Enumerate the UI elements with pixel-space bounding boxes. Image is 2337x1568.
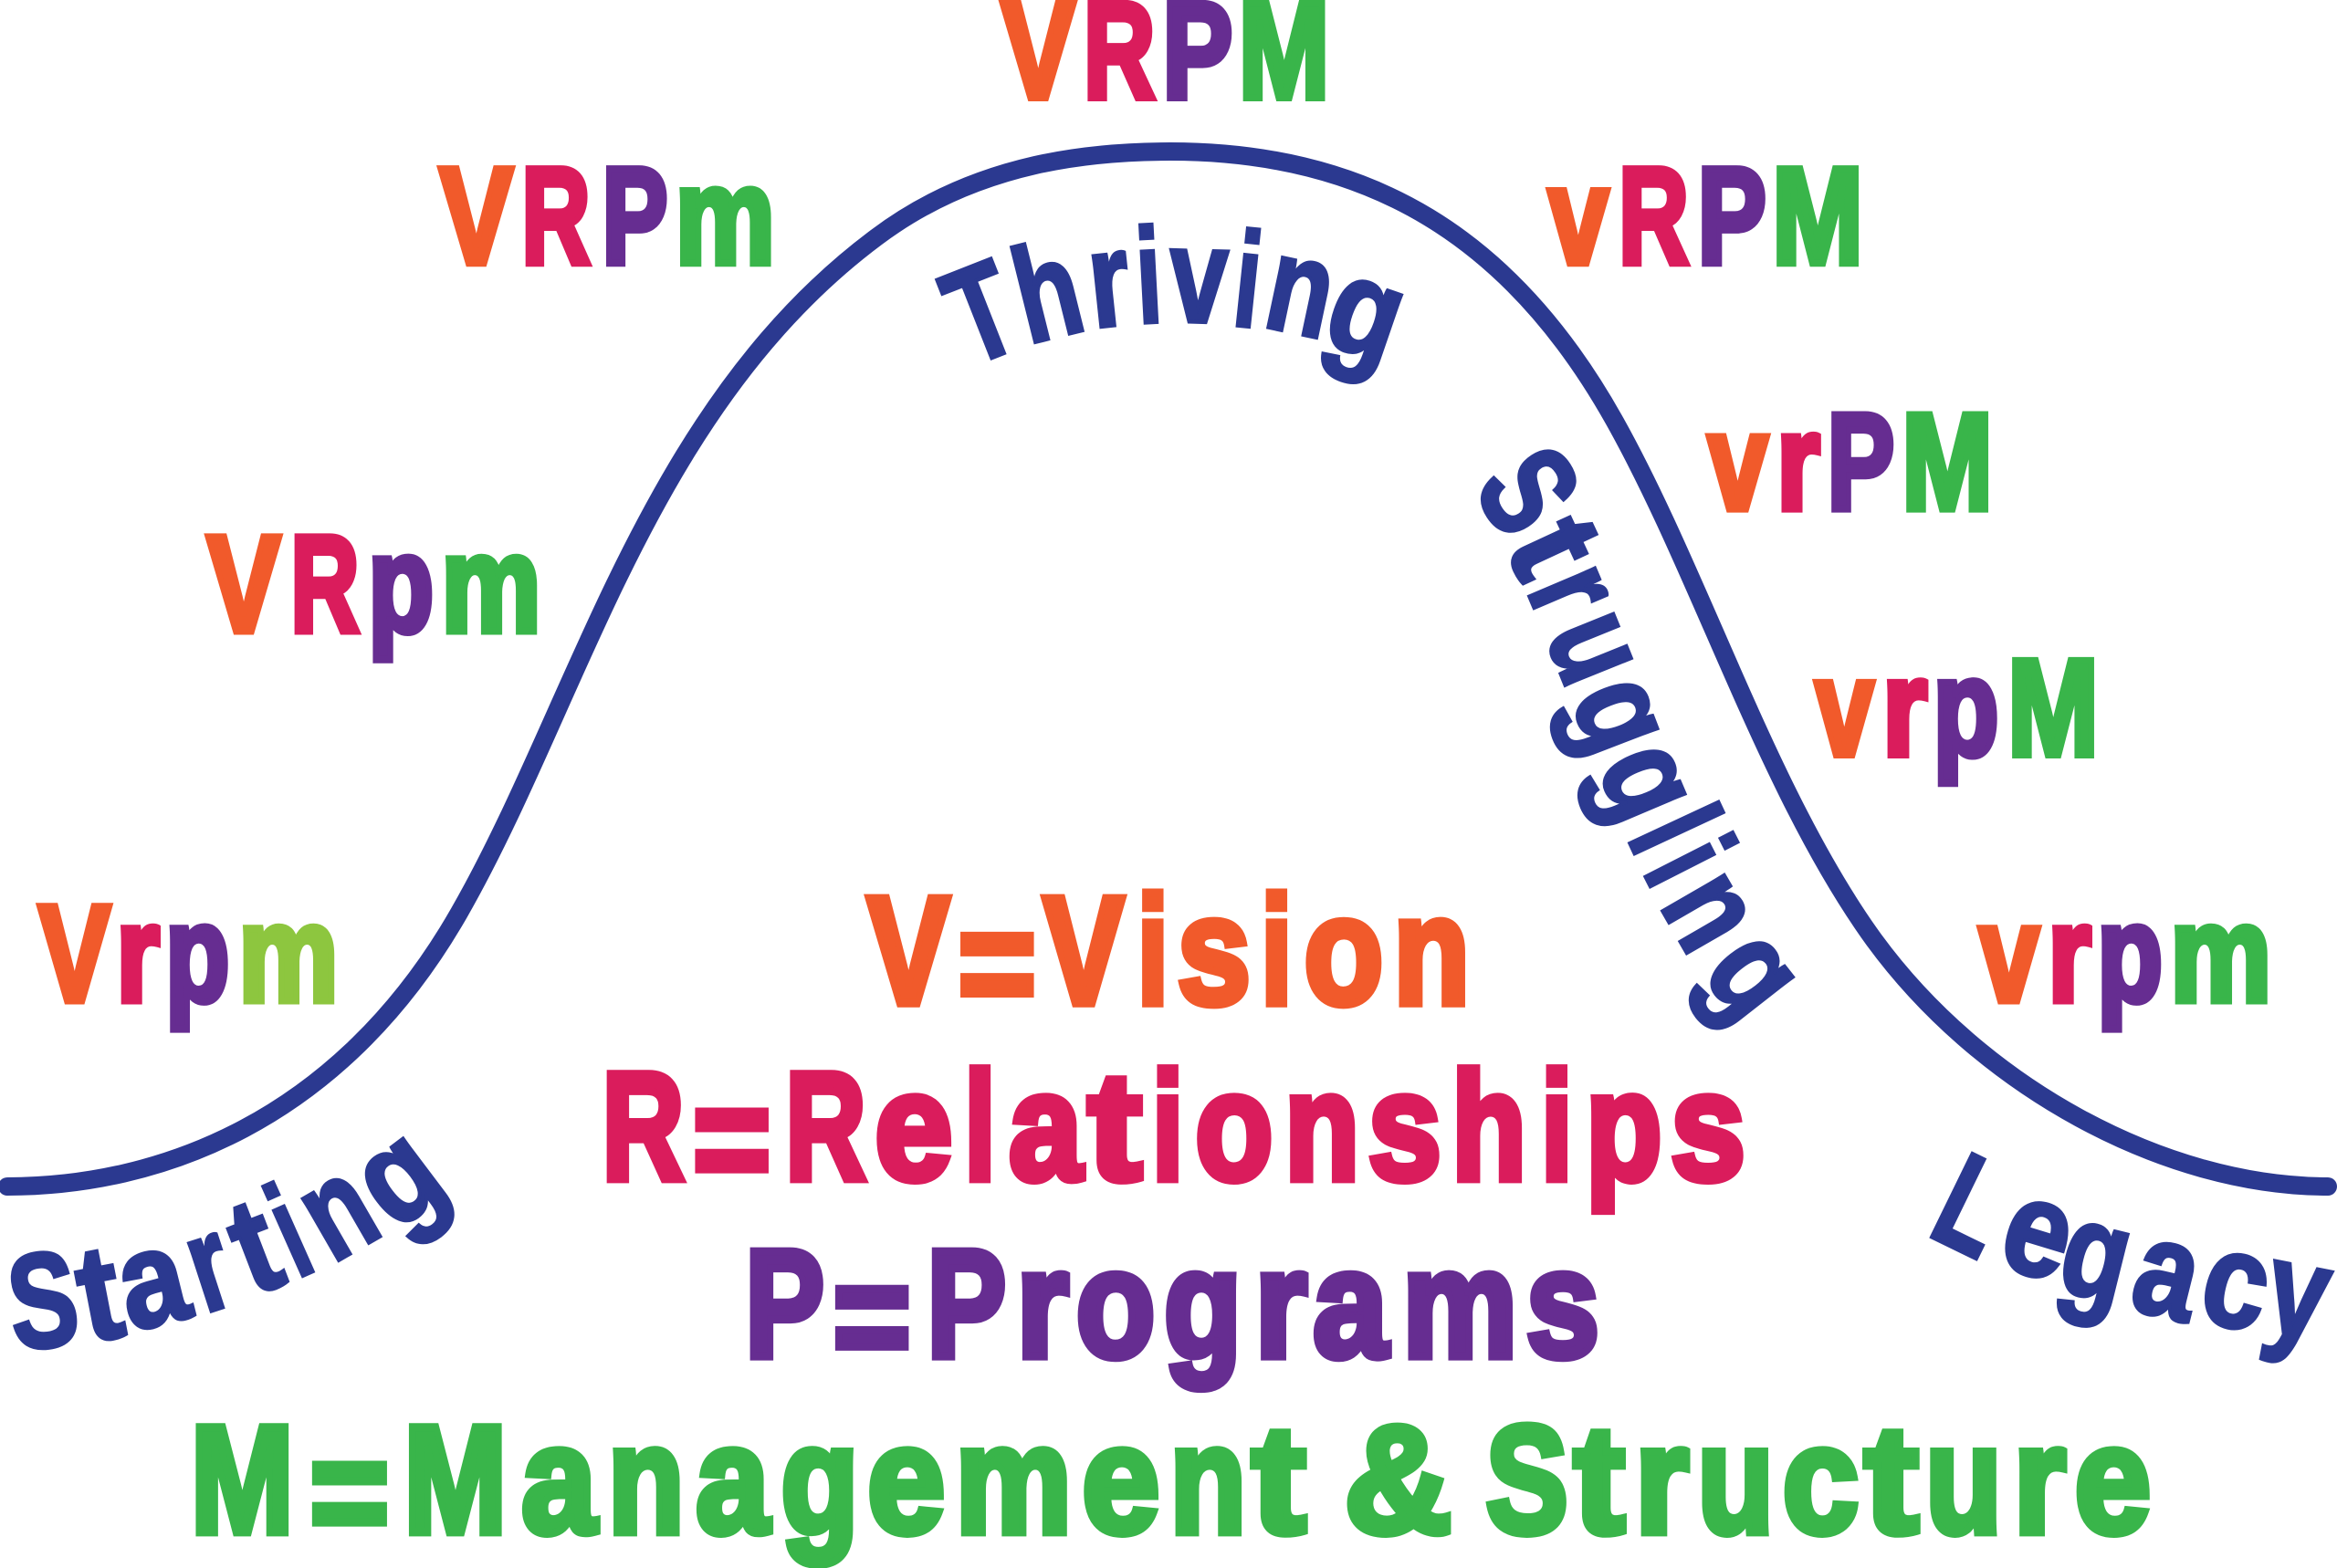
stage label: vRPM: v <box>1548 140 1609 293</box>
text: m <box>676 140 775 293</box>
legend: P=Programs: r <box>1255 1218 1307 1389</box>
curve label: Struggling: i <box>1617 815 1763 905</box>
curve label: Struggling: g <box>1542 654 1708 771</box>
stage label: Vrpm: V <box>38 877 110 1030</box>
curve label: Struggling: S <box>1447 422 1610 559</box>
legend: M=Management & Structure: g <box>781 1395 858 1566</box>
legend: R=Relationships: s <box>1368 1041 1441 1212</box>
text: m <box>238 877 339 1030</box>
legend: V=Vision: i <box>1261 865 1293 1036</box>
curve label: Legacy <box>1913 1124 2337 1371</box>
stage label: VRPM <box>1001 0 1329 127</box>
curve label: Struggling <box>1447 422 1838 1045</box>
legend: R=Relationships: n <box>1284 1041 1359 1212</box>
curve label: Struggling: r <box>1500 542 1654 636</box>
legend: P=Programs <box>745 1218 1599 1401</box>
curve label: Struggling: u <box>1518 589 1682 703</box>
curve label: Thriving: n <box>1254 206 1348 367</box>
curve label: Legacy: a <box>2120 1189 2217 1351</box>
legend: M=Management & Structure: a <box>521 1395 597 1565</box>
curve label: Thriving: i <box>1132 200 1166 352</box>
legend: M=Management & Structure: n <box>608 1395 684 1565</box>
stage label: VRPm <box>440 140 775 293</box>
curve label: Starting: t <box>208 1167 299 1323</box>
legend: P=Programs: g <box>1164 1218 1242 1390</box>
legend: R=Relationships: R <box>603 1041 684 1212</box>
curve label: Struggling: g <box>1569 719 1734 840</box>
curve label: Thriving: i <box>1228 204 1269 356</box>
legend: M=Management & Structure: M <box>191 1395 294 1565</box>
legend: R=Relationships: o <box>1195 1041 1273 1212</box>
legend: M=Management & Structure <box>191 1395 2151 1568</box>
stage label: vrpm <box>1979 877 2271 1030</box>
legend: R=Relationships: l <box>964 1041 996 1212</box>
stage label: vrpM: r <box>1882 632 1927 784</box>
legend: M=Management & Structure: u <box>1925 1395 2002 1565</box>
legend: M=Management & Structure: & <box>1345 1395 1451 1565</box>
legend: M=Management & Structure: t <box>1252 1395 1305 1565</box>
curve label: Starting <box>0 1093 470 1379</box>
legend: P=Programs: = <box>833 1230 911 1401</box>
legend: M=Management & Structure: c <box>1783 1395 1859 1565</box>
curve label: Legacy: e <box>1986 1147 2093 1311</box>
curve label: Thriving: r <box>1081 202 1137 356</box>
stage label: vrPM: r <box>1776 385 1820 538</box>
legend: R=Relationships: a <box>1009 1041 1083 1212</box>
stage label: vrPM: v <box>1708 385 1767 538</box>
curve label: Struggling: t <box>1478 494 1634 598</box>
legend: V=Vision <box>867 865 1470 1048</box>
stage label: VRpm <box>207 507 541 661</box>
legend: P=Programs: P <box>927 1218 1006 1389</box>
legend: P=Programs: r <box>1017 1218 1069 1389</box>
stage label: VRpm: R <box>290 507 359 661</box>
legend: V=Vision: = <box>959 877 1036 1048</box>
stage label: VRPm: V <box>440 140 513 293</box>
legend: M=Management & Structure: a <box>696 1395 770 1565</box>
curve label: Thriving: h <box>999 210 1096 372</box>
legend: V=Vision: V <box>1043 865 1125 1036</box>
legend: M=Management & Structure: M <box>403 1395 507 1565</box>
legend: M=Management & Structure: t <box>1574 1395 1625 1565</box>
stage label: vrpm: r <box>2048 877 2091 1030</box>
curve label: Thriving: T <box>925 231 1037 393</box>
stage label: Vrpm: p <box>165 877 229 1030</box>
curve label: Starting: r <box>167 1186 249 1341</box>
text: s <box>1671 1041 1745 1212</box>
curve label: Starting: n <box>271 1127 401 1289</box>
legend: M=Management & Structure: r <box>2014 1395 2066 1565</box>
text: n <box>1394 865 1470 1036</box>
legend: R=Relationships: t <box>1088 1041 1142 1212</box>
curve label: Starting: a <box>101 1197 203 1360</box>
stage label: vrPM: P <box>1828 385 1894 538</box>
stage label: VRPm: R <box>521 140 591 293</box>
text: s <box>1526 1218 1599 1389</box>
legend: R=Relationships: = <box>693 1053 770 1224</box>
stage label: VRpm: p <box>368 507 434 661</box>
curve label: Thriving: g <box>1310 226 1425 392</box>
legend: P=Programs: m <box>1402 1218 1517 1389</box>
legend: V=Vision: i <box>1137 865 1168 1036</box>
curve label: Struggling: n <box>1634 843 1797 974</box>
stage label: vRPM: P <box>1698 140 1766 293</box>
curve label: Starting: g <box>322 1093 470 1256</box>
curve label: Starting: S <box>0 1221 86 1379</box>
legend: V=Vision: s <box>1178 865 1251 1036</box>
curve label: Starting: t <box>64 1215 133 1371</box>
legend: R=Relationships: i <box>1541 1041 1572 1212</box>
curve label: Legacy: g <box>2047 1171 2147 1333</box>
legend: R=Relationships: i <box>1152 1041 1183 1212</box>
stage label: vrpM: v <box>1816 632 1873 784</box>
stage label: Vrpm <box>38 877 339 1030</box>
legend: M=Management & Structure: t <box>1865 1395 1918 1565</box>
stage label: vrpM <box>1816 632 2099 784</box>
life cycle bell curve <box>7 152 2328 1186</box>
text: e <box>2075 1395 2151 1565</box>
legend: M=Management & Structure: n <box>1170 1395 1246 1565</box>
curve label: Thriving: v <box>1168 199 1230 351</box>
legend: P=Programs: P <box>745 1218 824 1389</box>
curve label: Struggling: l <box>1600 785 1748 873</box>
legend: P=Programs: o <box>1076 1218 1155 1389</box>
stage label: VRpm: V <box>207 507 280 661</box>
legend: M=Management & Structure: e <box>1082 1395 1159 1565</box>
curve label: Thriving <box>925 199 1425 393</box>
legend: R=Relationships <box>603 1041 1745 1224</box>
text: M <box>2007 632 2099 784</box>
legend: M=Management & Structure: S <box>1486 1395 1568 1565</box>
curve label: Starting: i <box>246 1157 331 1305</box>
legend: M=Management & Structure: u <box>1698 1395 1774 1565</box>
text: M <box>1772 140 1863 293</box>
legend: R=Relationships: R <box>785 1041 866 1212</box>
legend: M=Management & Structure: r <box>1635 1395 1689 1565</box>
curve label: Struggling: g <box>1677 898 1838 1045</box>
text: m <box>441 507 541 661</box>
legend: R=Relationships: h <box>1451 1041 1526 1212</box>
legend: V=Vision: o <box>1305 865 1383 1036</box>
legend: M=Management & Structure: m <box>956 1395 1072 1565</box>
stage label: vrpm: v <box>1979 877 2039 1030</box>
legend: R=Relationships: p <box>1586 1041 1661 1213</box>
stage label: Vrpm: r <box>116 877 160 1030</box>
stage label: vRPM <box>1548 140 1863 293</box>
stage label: vRPM: R <box>1619 140 1689 293</box>
stage label: vrpm: p <box>2097 877 2163 1030</box>
stage label: VRPm: P <box>603 140 667 293</box>
curve label: Legacy: L <box>1913 1124 2033 1286</box>
legend: P=Programs: a <box>1313 1218 1389 1389</box>
legend: R=Relationships: e <box>875 1041 952 1212</box>
text: M <box>1902 385 1993 538</box>
stage label: vrpM: p <box>1934 632 1998 784</box>
legend: V=Vision: V <box>867 865 950 1036</box>
legend: M=Management & Structure: e <box>867 1395 945 1565</box>
stage label: vrPM <box>1708 385 1993 538</box>
